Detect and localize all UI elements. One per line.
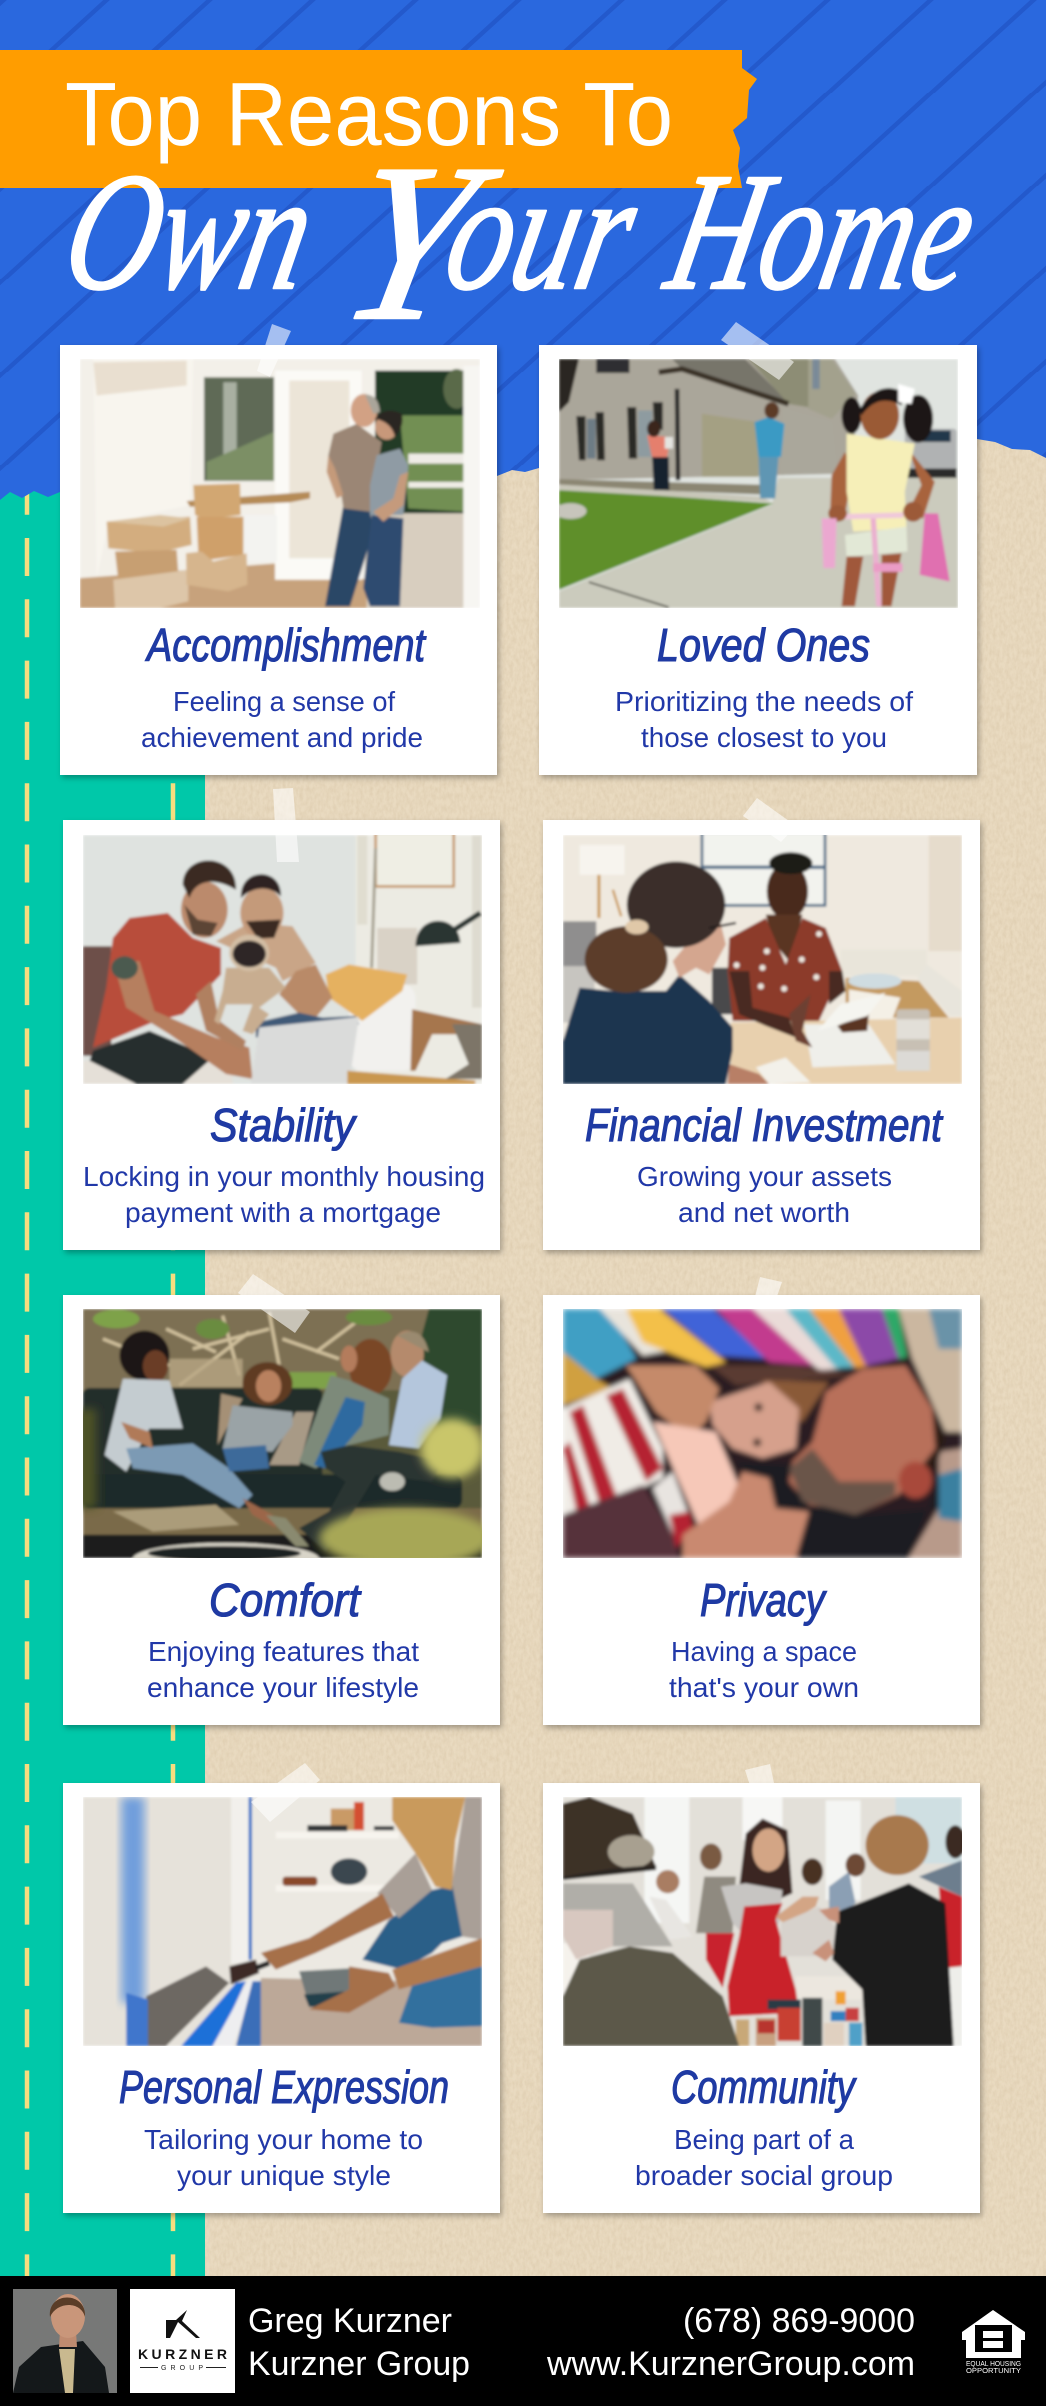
description: Personal Expression <box>144 2124 423 2191</box>
card: Loved Ones <box>539 345 977 775</box>
description: Loved Ones: those closest to you <box>641 722 887 753</box>
agent headshot <box>13 2289 117 2393</box>
photo: volunteers at a food drive <box>563 1797 962 2046</box>
description: Stability <box>83 1161 485 1228</box>
description: Accomplishment: achievement and pride <box>141 722 423 753</box>
description: Loved Ones <box>615 686 913 753</box>
description: Financial Investment <box>637 1161 892 1228</box>
photo: father and child under blanket fort <box>563 1309 962 1558</box>
description: Comfort <box>147 1636 419 1703</box>
icon: equal housing opportunity <box>962 2310 1025 2375</box>
title: Own Your Home: Y <box>324 118 515 367</box>
description: Personal Expression: your unique style <box>177 2160 391 2191</box>
description: Stability: payment with a mortgage <box>125 1197 441 1228</box>
background: teal strip with stitched dashes <box>0 477 205 2280</box>
footer bar <box>0 2276 1046 2406</box>
background: blue torn paper with diagonal stripes <box>0 0 1046 500</box>
card: Accomplishment <box>60 345 497 775</box>
description: Financial Investment: Growing your assets <box>637 1161 892 1192</box>
card: Financial Investment <box>543 820 980 1250</box>
logo: Kurzner Group <box>130 2289 235 2393</box>
title: Own Your Home: our <box>432 139 652 325</box>
agent name: Greg Kurzner <box>248 2302 452 2340</box>
contact details <box>546 2302 915 2383</box>
description: Financial Investment: and net worth <box>678 1197 850 1228</box>
description: Stability: Locking in your monthly housing <box>83 1161 485 1192</box>
agent name: Kurzner Group <box>248 2345 470 2383</box>
description: Loved Ones: Prioritizing the needs of <box>615 686 913 717</box>
card: Privacy <box>543 1295 980 1725</box>
card: Stability <box>63 820 500 1250</box>
photo: meeting with a financial advisor <box>563 835 962 1084</box>
photo: family on outdoor sofa <box>83 1309 482 1558</box>
orange title banner <box>0 50 757 188</box>
description: Comfort: enhance your lifestyle <box>147 1672 419 1703</box>
card: Comfort <box>63 1295 500 1725</box>
heading: Comfort: Comfort <box>209 1574 362 1626</box>
photo: girl on scooter in front of house <box>559 359 958 608</box>
card: Community <box>543 1783 980 2213</box>
translucent tape pieces holding the cards <box>238 322 796 1822</box>
title: Own Your Home <box>50 118 992 367</box>
description: Community: broader social group <box>635 2160 893 2191</box>
heading: Accomplishment: Accomplishment <box>145 619 427 671</box>
heading: Privacy: Privacy <box>700 1574 827 1626</box>
photo: woman painting a wall <box>83 1797 482 2046</box>
icon: equal housing opportunity: EQUAL HOUSING <box>966 2359 1021 2368</box>
description: Community: Being part of a <box>674 2124 854 2155</box>
contact details: www.KurznerGroup.com <box>546 2345 915 2383</box>
description: Accomplishment <box>141 686 423 753</box>
title: Own Your Home: Own <box>50 139 330 325</box>
heading: Personal Expression: Personal Expression <box>119 2061 449 2113</box>
photo: couple in new home with boxes <box>80 359 480 608</box>
logo mark <box>166 2310 200 2338</box>
photo: couple with pug and laptop <box>83 835 482 1084</box>
description: Community <box>635 2124 893 2191</box>
card: Personal Expression <box>63 1783 500 2213</box>
heading: Loved Ones: Loved Ones <box>657 619 870 671</box>
description: Privacy: Having a space <box>671 1636 857 1667</box>
heading: Financial Investment: Financial Investment <box>585 1099 944 1151</box>
description: Privacy: that's your own <box>669 1672 859 1703</box>
icon: equal housing opportunity: OPPORTUNITY <box>966 2366 1021 2375</box>
logo: Kurzner Group: GROUP <box>161 2365 203 2372</box>
agent name <box>248 2302 470 2383</box>
heading: Community: Community <box>671 2061 857 2113</box>
description: Comfort: Enjoying features that <box>148 1636 419 1667</box>
title: Top Reasons To: Top Reasons To <box>65 65 673 165</box>
description: Accomplishment: Feeling a sense of <box>173 686 395 717</box>
logo: Kurzner Group: KURZNER <box>138 2346 227 2362</box>
heading: Stability: Stability <box>210 1099 358 1151</box>
description: Personal Expression: Tailoring your home to <box>144 2124 423 2155</box>
contact details: (678) 869-9000 <box>683 2302 915 2340</box>
description: Privacy <box>669 1636 859 1703</box>
